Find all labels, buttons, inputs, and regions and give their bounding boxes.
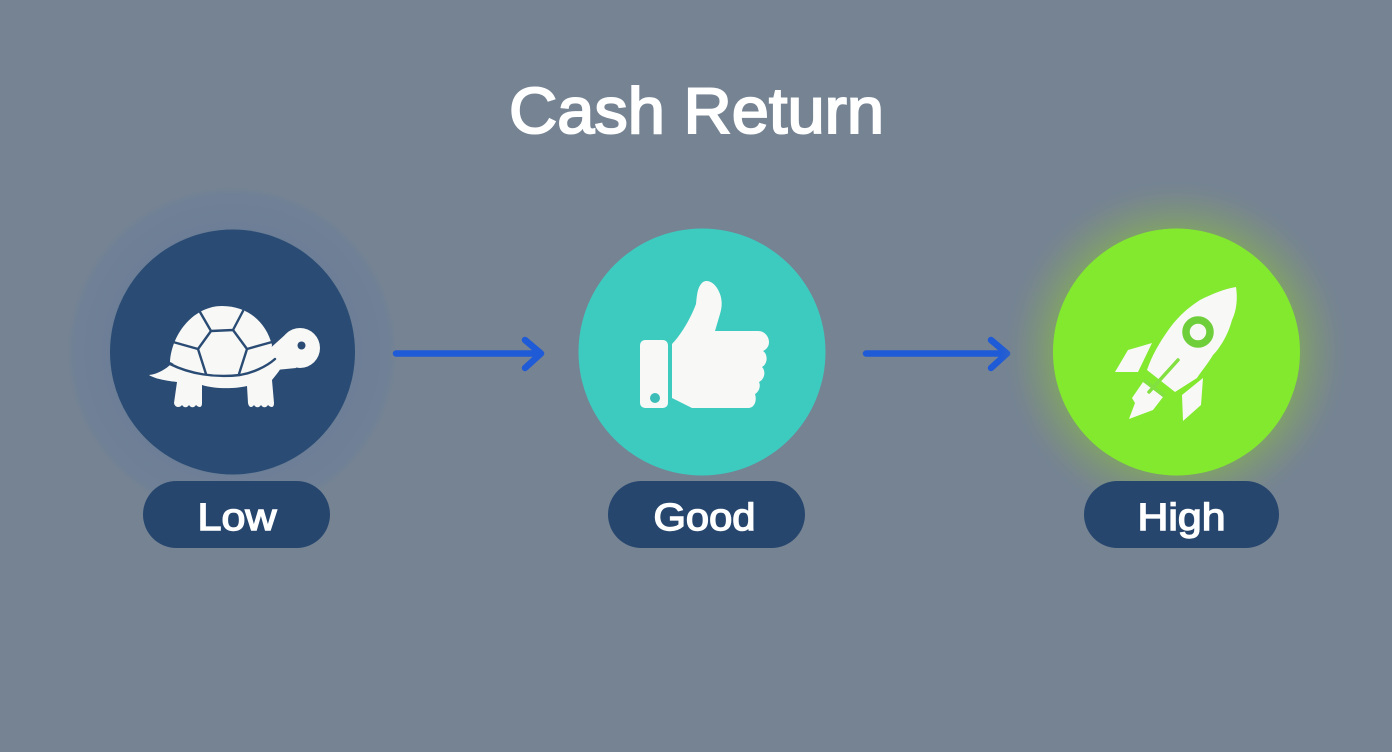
circle: high [1053, 228, 1300, 476]
circle: good [578, 228, 826, 476]
icon: turtle [149, 306, 320, 407]
pill: high: High [1138, 497, 1226, 539]
pill: good: Good [654, 497, 756, 539]
pill: low: Low [198, 497, 277, 539]
arrow: low to good [396, 340, 541, 368]
step: low [66, 186, 398, 548]
halo: low [66, 186, 398, 518]
pill: low [143, 481, 330, 548]
pill: good [608, 481, 805, 548]
circle: low [110, 230, 355, 474]
glow: high [1000, 176, 1352, 528]
arrow: good to high [866, 340, 1007, 368]
title: Cash Return [509, 74, 884, 147]
step: good [578, 228, 826, 548]
icon: thumbs up [640, 281, 769, 408]
pill: high [1084, 481, 1279, 548]
step: high [1000, 176, 1352, 548]
icon: rocket [1115, 287, 1237, 421]
